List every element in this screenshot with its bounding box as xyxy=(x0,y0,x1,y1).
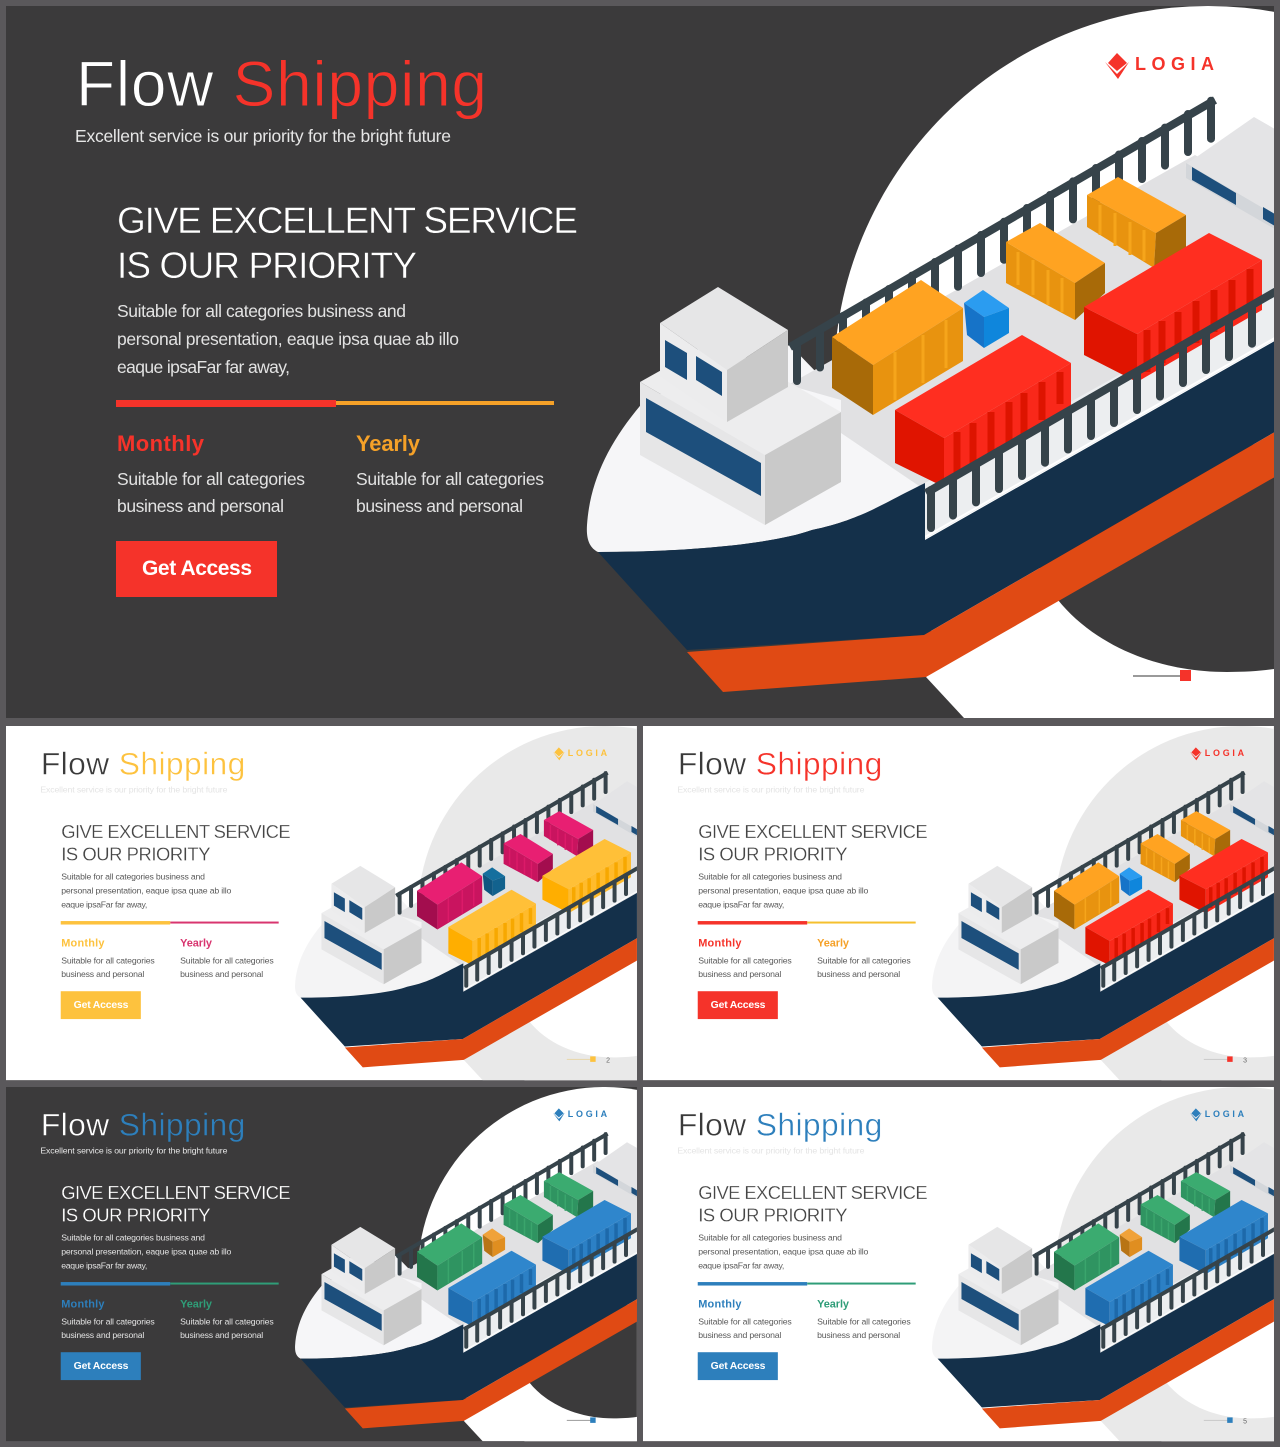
button: Get Access xyxy=(74,1000,129,1011)
heading xyxy=(61,1182,291,1225)
button: Get Access xyxy=(711,1000,766,1011)
subtitle: Excellent service is our priority for the bright future xyxy=(677,785,865,795)
pagination xyxy=(1204,1417,1247,1425)
illustration: container ship xyxy=(932,773,1277,1067)
paragraph xyxy=(61,872,232,910)
panel: small light slide blue xyxy=(643,1087,1280,1447)
heading: IS OUR PRIORITY xyxy=(61,1204,211,1225)
paragraph xyxy=(698,872,869,910)
paragraph: personal presentation, eaque ipsa quae ab illo xyxy=(61,1247,232,1257)
column: monthly xyxy=(698,1298,792,1340)
pagination xyxy=(566,1056,610,1062)
paragraph xyxy=(698,1233,869,1271)
subtitle: Excellent service is our priority for the bright future xyxy=(75,126,451,146)
paragraph: personal presentation, eaque ipsa quae ab illo xyxy=(698,1247,869,1257)
panel: small light slide yellow xyxy=(6,726,637,1080)
logo xyxy=(1190,1108,1245,1121)
heading xyxy=(699,825,927,860)
illustration: container ship xyxy=(587,100,1280,692)
column: yearly: Suitable for all categories xyxy=(817,1316,911,1326)
pagination xyxy=(567,1417,596,1423)
column: yearly xyxy=(817,937,911,979)
heading: GIVE EXCELLENT SERVICE xyxy=(698,821,928,842)
heading: GIVE EXCELLENT SERVICE xyxy=(698,1182,928,1203)
column: yearly: business and personal xyxy=(180,1330,263,1340)
heading: GIVE EXCELLENT SERVICE xyxy=(117,200,578,241)
title: Flow Shipping xyxy=(76,48,487,120)
column: yearly: business and personal xyxy=(817,1330,900,1340)
paragraph: Suitable for all categories business and xyxy=(61,872,205,882)
column: monthly: business and personal xyxy=(61,1330,144,1340)
column: monthly xyxy=(117,431,305,516)
column: monthly: Monthly xyxy=(61,1298,105,1310)
heading: IS OUR PRIORITY xyxy=(61,843,211,864)
paragraph: eaque ipsaFar far away, xyxy=(61,1261,147,1271)
button: Get Access xyxy=(142,557,252,580)
button xyxy=(61,991,141,1019)
paragraph: eaque ipsaFar far away, xyxy=(117,357,290,377)
divider bars xyxy=(61,921,279,925)
heading: GIVE EXCELLENT SERVICE xyxy=(61,821,291,842)
column: monthly: business and personal xyxy=(698,1330,781,1340)
logo: LOGIA xyxy=(568,748,608,758)
subtitle: Excellent service is our priority for the bright future xyxy=(40,1146,228,1156)
column: monthly: Suitable for all categories xyxy=(61,955,155,965)
column: monthly: Suitable for all categories xyxy=(117,469,305,489)
column: yearly: business and personal xyxy=(356,496,523,516)
column: monthly: business and personal xyxy=(61,969,144,979)
heading: GIVE EXCELLENT SERVICE xyxy=(61,1182,291,1203)
column: monthly: Monthly xyxy=(698,1298,742,1310)
paragraph: Suitable for all categories business and xyxy=(117,301,406,321)
panel: small dark slide blue xyxy=(6,1087,637,1442)
column: yearly xyxy=(180,937,274,979)
column: yearly: Yearly xyxy=(817,937,850,949)
divider bars xyxy=(116,400,554,407)
paragraph: eaque ipsaFar far away, xyxy=(698,1261,784,1271)
column: monthly: Monthly xyxy=(698,937,742,949)
column: monthly: Suitable for all categories xyxy=(698,1316,792,1326)
column: yearly: Yearly xyxy=(356,431,421,456)
column: monthly xyxy=(61,1298,155,1340)
button: Get Access xyxy=(711,1361,766,1372)
divider bars xyxy=(698,921,916,925)
column: monthly xyxy=(698,937,792,979)
illustration: container ship xyxy=(932,1134,1277,1428)
paragraph xyxy=(117,301,459,377)
heading: IS OUR PRIORITY xyxy=(698,843,848,864)
column: yearly: Suitable for all categories xyxy=(180,1316,274,1326)
subtitle: Excellent service is our priority for the bright future xyxy=(677,1146,865,1156)
column: monthly: Suitable for all categories xyxy=(698,955,792,965)
column: yearly: Suitable for all categories xyxy=(356,469,544,489)
paragraph: personal presentation, eaque ipsa quae ab illo xyxy=(61,886,232,896)
column: monthly: Monthly xyxy=(117,431,205,456)
pagination xyxy=(1204,1056,1247,1062)
column: monthly xyxy=(61,937,155,979)
panel: small light slide red xyxy=(643,726,1280,1098)
column: yearly: Suitable for all categories xyxy=(180,955,274,965)
column: yearly: Suitable for all categories xyxy=(817,955,911,965)
button xyxy=(698,1352,778,1380)
heading xyxy=(62,825,290,860)
button xyxy=(116,541,277,597)
title: Flow Shipping xyxy=(678,746,882,782)
logo xyxy=(1190,747,1245,760)
button xyxy=(61,1352,141,1380)
column: yearly xyxy=(180,1298,274,1340)
illustration: container ship xyxy=(295,773,640,1067)
button xyxy=(698,991,778,1019)
logo: LOGIA xyxy=(1205,748,1245,758)
logo xyxy=(553,1108,608,1121)
divider bars xyxy=(61,1282,279,1286)
pagination: 2 xyxy=(606,1057,610,1064)
pagination xyxy=(1133,670,1191,681)
column: yearly: business and personal xyxy=(180,969,263,979)
paragraph xyxy=(61,1233,232,1271)
column: monthly: Suitable for all categories xyxy=(61,1316,155,1326)
title: Flow Shipping xyxy=(678,1107,882,1143)
column: monthly: business and personal xyxy=(117,496,284,516)
logo xyxy=(1105,53,1214,79)
paragraph: Suitable for all categories business and xyxy=(61,1233,205,1243)
column: yearly: business and personal xyxy=(817,969,900,979)
logo: LOGIA xyxy=(1135,54,1214,74)
heading: IS OUR PRIORITY xyxy=(698,1204,848,1225)
heading xyxy=(698,1182,928,1225)
column: yearly: Yearly xyxy=(180,937,213,949)
logo: LOGIA xyxy=(1205,1109,1245,1119)
panel: large dark slide xyxy=(6,6,1280,754)
title: Flow Shipping xyxy=(41,1107,245,1143)
logo: LOGIA xyxy=(568,1109,608,1119)
pagination: 5 xyxy=(1243,1418,1247,1425)
heading: IS OUR PRIORITY xyxy=(117,245,417,286)
paragraph: eaque ipsaFar far away, xyxy=(698,900,784,910)
column: yearly: Yearly xyxy=(817,1298,850,1310)
column: monthly: business and personal xyxy=(698,969,781,979)
column: yearly xyxy=(817,1298,911,1340)
illustration: container ship xyxy=(295,1134,640,1428)
title: Flow Shipping xyxy=(41,746,245,782)
subtitle: Excellent service is our priority for the bright future xyxy=(40,785,228,795)
heading xyxy=(118,206,576,278)
paragraph: Suitable for all categories business and xyxy=(698,872,842,882)
paragraph: eaque ipsaFar far away, xyxy=(61,900,147,910)
pagination: 3 xyxy=(1243,1057,1247,1064)
paragraph: personal presentation, eaque ipsa quae ab illo xyxy=(698,886,869,896)
paragraph: Suitable for all categories business and xyxy=(698,1233,842,1243)
logo xyxy=(553,747,608,760)
button: Get Access xyxy=(74,1361,129,1372)
paragraph: personal presentation, eaque ipsa quae ab illo xyxy=(117,329,459,349)
column: yearly: Yearly xyxy=(180,1298,213,1310)
column: yearly xyxy=(356,431,544,516)
column: monthly: Monthly xyxy=(61,937,105,949)
divider bars xyxy=(698,1282,916,1286)
